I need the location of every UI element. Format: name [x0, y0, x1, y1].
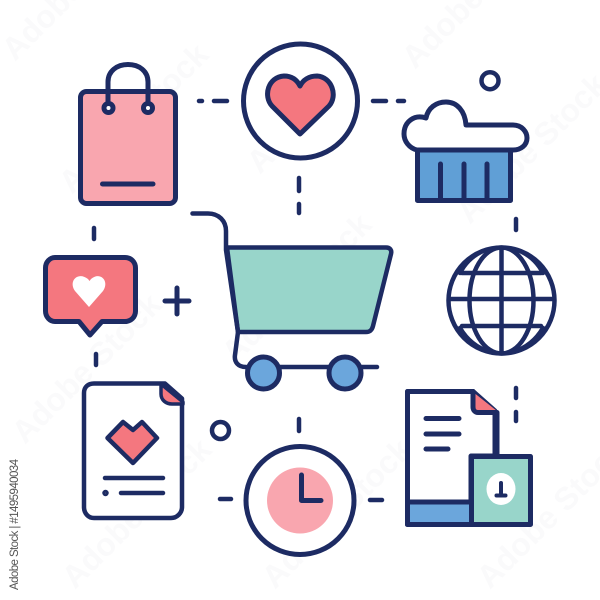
icon: shopping bag: [80, 64, 176, 204]
text: Adobe Stock: [54, 431, 218, 595]
icon: clock: [246, 446, 354, 554]
text: Adobe Stock: [51, 36, 215, 200]
text: Adobe Stock: [214, 206, 378, 370]
text: Adobe: [239, 84, 335, 180]
icon: globe: [448, 248, 554, 354]
stock id caption: Adobe Stock | #1495940034: [9, 458, 21, 590]
icon: document with heart: [84, 384, 183, 518]
text: Adobe Stock: [4, 286, 168, 450]
icon: like speech bubble: [46, 258, 136, 335]
dashed connectors: [94, 101, 516, 500]
icon: heart in circle: [244, 44, 358, 158]
small ring top right: [482, 72, 498, 89]
icon: document with profile card: [408, 392, 530, 524]
icon: cloud basket: [404, 102, 527, 200]
text: Adobe Stock: [254, 431, 418, 595]
small ring bottom left: [212, 422, 229, 439]
icon: shopping cart: [192, 214, 391, 389]
icon: plus sign: [165, 288, 189, 314]
